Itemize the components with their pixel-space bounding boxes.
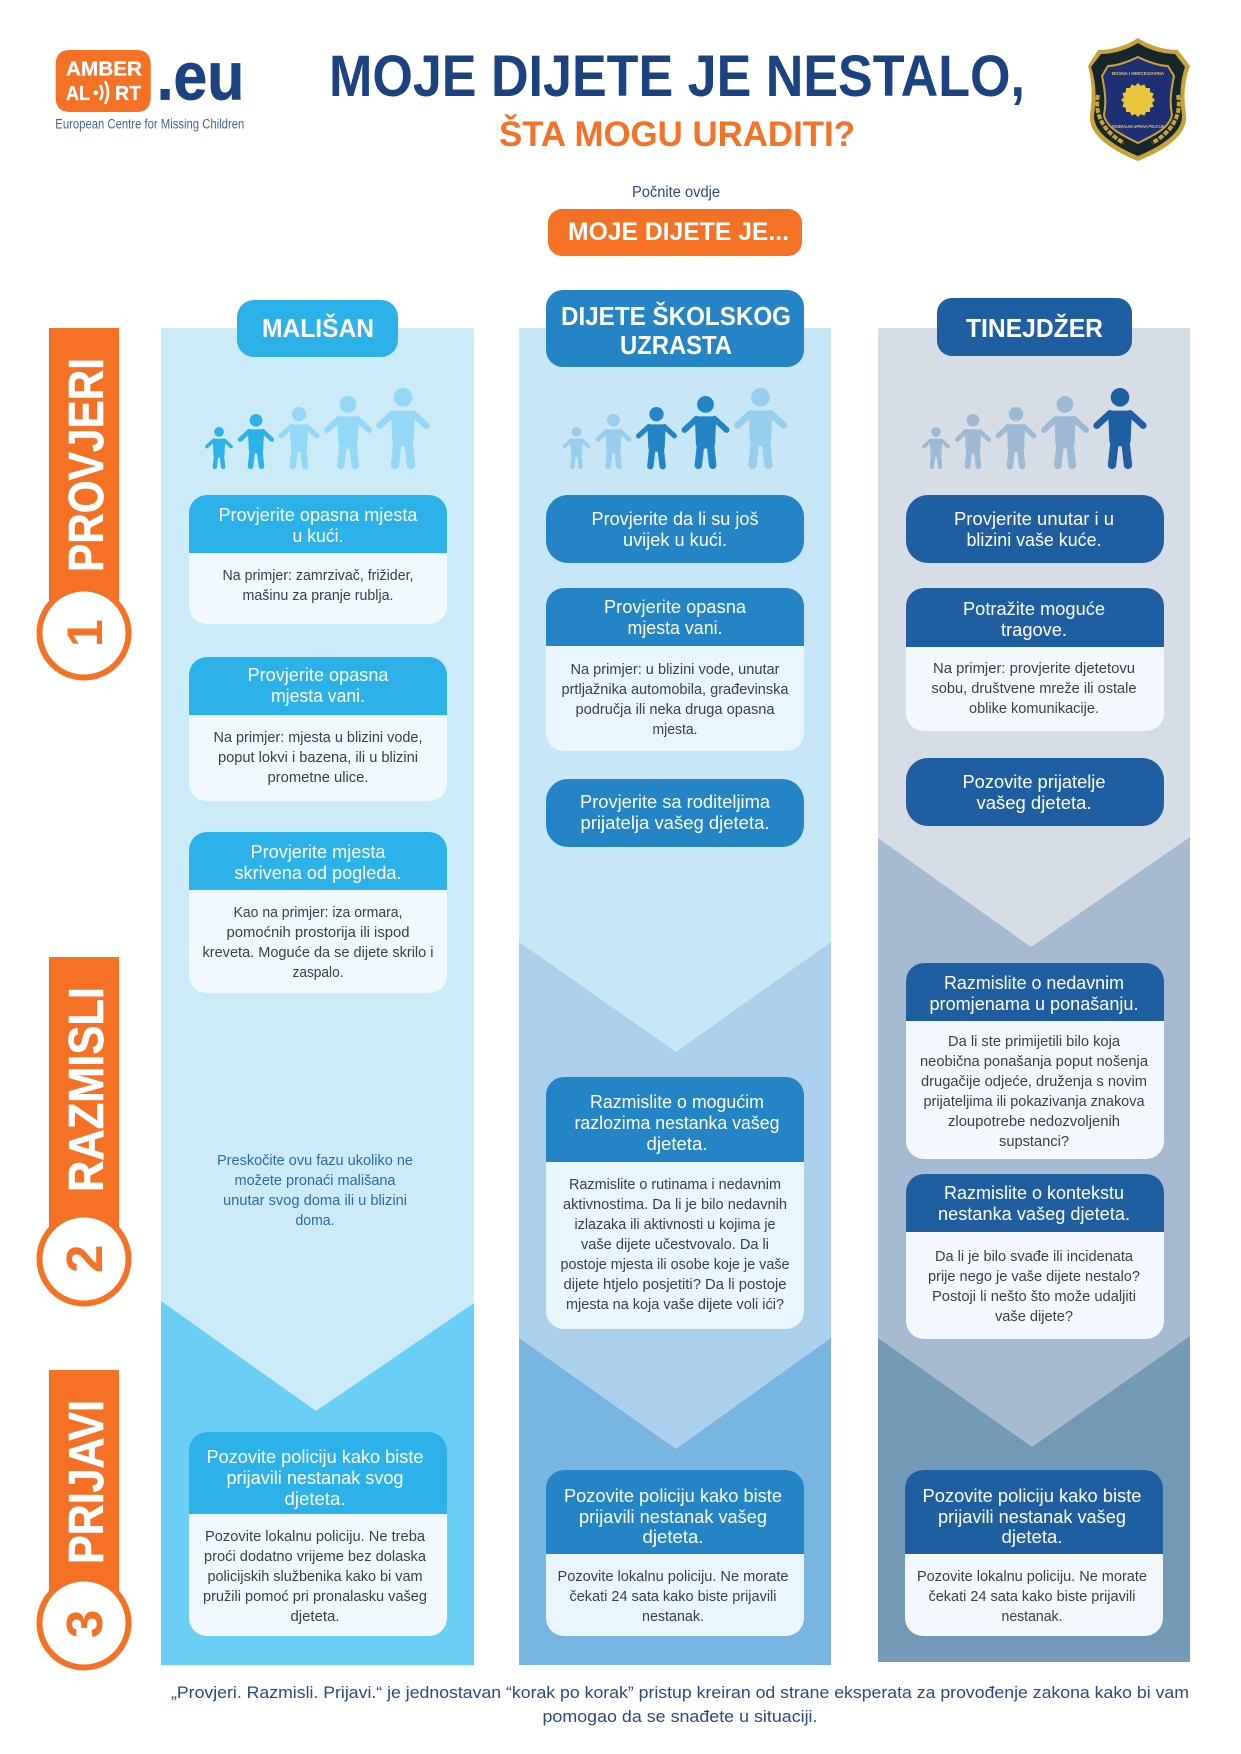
card: school age friends parents [546, 779, 804, 847]
panel: column toddler background [161, 328, 474, 1665]
card: toddler hidden places: zaspalo. [292, 964, 344, 981]
card: teenager call police: čekati 24 sata kako biste prijavili [928, 1588, 1136, 1605]
step 2: RAZMISLI: RAZMISLI [60, 987, 114, 1192]
card: toddler dangerous places outside: Provjerite opasna [248, 665, 389, 685]
step 3: PRIJAVI [40, 1370, 128, 1668]
card: toddler dangerous places outside: prometne ulice. [268, 769, 368, 786]
icon: age figures teenager [924, 388, 1143, 467]
note: toddler skip phase: doma. [296, 1212, 334, 1229]
card: school age dangerous places outside: mjesta. [652, 721, 698, 738]
logo badge: AL [66, 83, 90, 105]
card: teenager check near home: blizini vaše kuće. [966, 530, 1102, 550]
card: teenager behaviour changes: supstanci? [999, 1133, 1069, 1150]
card: toddler call police: Pozovite lokalnu policiju. Ne treba [205, 1528, 426, 1545]
icon: police badge [1088, 38, 1190, 161]
card: toddler call police [189, 1432, 447, 1636]
card: toddler hidden places: Kao na primjer: iza ormara, [234, 904, 402, 921]
icon: age figures school age [564, 388, 784, 467]
logo badge: RT [115, 83, 141, 105]
icon: age figures toddler [207, 388, 426, 467]
icon: police badge: BOSNA I HERCEGOVINA [1112, 71, 1165, 76]
card: toddler hidden places: kreveta. Moguće da se dijete skrilo i [202, 944, 434, 961]
title: MOJE DIJETE JE NESTALO, [329, 44, 1025, 109]
card: school age call police: djeteta. [642, 1527, 704, 1547]
card: toddler dangerous places outside: poput lokvi i bazena, ili u blizini [218, 749, 418, 766]
card: toddler dangerous places outside: Na primjer: mjesta u blizini vode, [214, 729, 422, 746]
card: teenager context: Razmislite o kontekstu [944, 1183, 1124, 1203]
card: school age call police: nestanak. [642, 1608, 704, 1625]
card: school age reasons: Razmislite o mogućim [590, 1092, 764, 1112]
card: teenager behaviour changes: prijateljima ili pokazivanja znakova [924, 1093, 1145, 1110]
card: school age dangerous places outside: mjesta vani. [628, 618, 722, 638]
card: teenager context: vaše dijete? [995, 1308, 1073, 1325]
card: school age dangerous places outside: područja ili neka druga opasna [576, 701, 775, 718]
card: school age still at home [546, 495, 804, 563]
start button: MOJE DIJETE JE... [568, 218, 789, 246]
card: school age friends parents: Provjerite sa roditeljima [580, 792, 771, 812]
note: toddler skip phase: možete pronaći mališana [234, 1172, 396, 1189]
card: teenager call police: Pozovite policiju kako biste [922, 1486, 1142, 1506]
card: school age reasons: djeteta. [646, 1134, 708, 1154]
step 1: PROVJERI [40, 328, 128, 678]
step 2: RAZMISLI [40, 957, 128, 1304]
card: teenager context: prije nego je vaše dijete nestalo? [928, 1268, 1140, 1285]
card: teenager clues [906, 588, 1164, 731]
footer note [171, 1683, 1189, 1726]
card: teenager clues: tragove. [1001, 620, 1067, 640]
card: school age friends parents: prijatelja vašeg djeteta. [580, 813, 770, 833]
footer note: pomogao da se snađete u situaciji. [542, 1707, 818, 1726]
card: school age reasons [546, 1077, 804, 1329]
card: teenager call police: nestanak. [1002, 1608, 1062, 1625]
card: school age call police [546, 1470, 804, 1636]
note: toddler skip phase: unutar svog doma ili u blizini [223, 1192, 407, 1209]
card: school age reasons: Razmislite o rutinama i nedavnim [569, 1176, 781, 1193]
icon: police badge: FEDERALNA UPRAVA POLICIJE [1112, 124, 1164, 129]
card: teenager behaviour changes: drugačije odjeće, druženja s novim [921, 1073, 1147, 1090]
card: teenager context: Postoji li nešto što može udaljiti [932, 1288, 1136, 1305]
card: teenager call police: djeteta. [1002, 1527, 1062, 1547]
card: toddler call police: prijavili nestanak svog [226, 1468, 404, 1488]
step 1: PROVJERI: 1 [57, 619, 113, 647]
card: teenager behaviour changes: Da li ste primijetili bilo koja [948, 1033, 1121, 1050]
card: teenager behaviour changes: Razmislite o nedavnim [944, 973, 1124, 993]
card: school age dangerous places outside: prtljažnika automobila, građevinska [562, 681, 789, 698]
card: school age dangerous places outside: Provjerite opasna [604, 597, 747, 617]
card: teenager call police [905, 1470, 1163, 1636]
card: school age call police: Pozovite policiju kako biste [564, 1486, 782, 1506]
card: toddler call police: pružili pomoć pri pronalasku vašeg [203, 1588, 427, 1605]
card: toddler dangerous places at home: u kući. [292, 526, 344, 546]
note: toddler skip phase [217, 1152, 413, 1229]
heading: teenager [937, 298, 1132, 356]
heading: school age: UZRASTA [620, 330, 732, 360]
card: teenager call police: prijavili nestanak vašeg [938, 1507, 1126, 1527]
card: school age reasons: postoje mjesta ili osobe koje je vaše [560, 1256, 790, 1273]
logo domain: .eu [157, 38, 244, 114]
logo tagline: European Centre for Missing Children [55, 116, 244, 131]
card: teenager check near home: Provjerite unutar i u [954, 509, 1114, 529]
card: teenager behaviour changes: neobična ponašanja poput nošenja [920, 1053, 1149, 1070]
card: toddler dangerous places at home [189, 495, 447, 624]
card: teenager context: nestanka vašeg djeteta. [938, 1204, 1130, 1224]
card: teenager context [906, 1174, 1164, 1339]
panel: column teenager background [878, 328, 1190, 1662]
card: toddler hidden places: Provjerite mjesta [250, 842, 386, 862]
heading: toddler [237, 300, 398, 357]
card: school age reasons: aktivnostima. Da li je bilo nedavnih [563, 1196, 787, 1213]
step 2: RAZMISLI: 2 [56, 1245, 113, 1273]
heading: school age: DIJETE ŠKOLSKOG [561, 301, 791, 331]
card: school age reasons: vaše dijete učestvovalo. Da li [581, 1236, 769, 1253]
card: toddler dangerous places at home: Na primjer: zamrzivač, frižider, [222, 567, 414, 584]
step 3: PRIJAVI: 3 [56, 1610, 113, 1638]
step 3: PRIJAVI: PRIJAVI [60, 1400, 114, 1564]
card: school age reasons: dijete htjelo posjetiti? Da li postoje [564, 1276, 786, 1293]
card: teenager call police: Pozovite lokalnu policiju. Ne morate [917, 1568, 1147, 1585]
card: teenager call friends: Pozovite prijatelje [962, 772, 1106, 792]
card: toddler dangerous places at home: Provjerite opasna mjesta [218, 505, 418, 525]
logo: Amber Alert [55, 38, 244, 131]
card: school age dangerous places outside [546, 588, 804, 751]
card: toddler hidden places [189, 832, 447, 993]
card: school age call police: Pozovite lokalnu policiju. Ne morate [558, 1568, 788, 1585]
start button [548, 209, 802, 256]
card: toddler dangerous places at home: mašinu za pranje rublja. [242, 587, 394, 604]
logo badge: AMBER [66, 59, 143, 81]
card: toddler hidden places: pomoćnih prostorija ili ispod [226, 924, 410, 941]
card: toddler call police: djeteta. [290, 1608, 340, 1625]
subtitle: ŠTA MOGU URADITI? [499, 114, 855, 154]
card: teenager call friends: vašeg djeteta. [976, 793, 1092, 813]
heading: toddler: MALIŠAN [262, 313, 374, 343]
card: school age still at home: uvijek u kući. [623, 530, 727, 550]
card: toddler hidden places: skrivena od pogleda. [234, 863, 402, 883]
card: school age reasons: izlazaka ili aktivnosti u kojima je [574, 1216, 776, 1233]
card: teenager clues: oblike komunikacije. [969, 700, 1099, 717]
card: teenager context: Da li je bilo svađe ili incidenata [935, 1248, 1134, 1265]
card: school age dangerous places outside: Na primjer: u blizini vode, unutar [570, 661, 780, 678]
card: toddler call police: djeteta. [284, 1489, 346, 1509]
note: toddler skip phase: Preskočite ovu fazu ukoliko ne [217, 1152, 413, 1169]
panel: column school age background [519, 328, 831, 1665]
card: school age still at home: Provjerite da li su još [592, 509, 758, 529]
card: school age call police: čekati 24 sata kako biste prijavili [570, 1588, 776, 1605]
card: toddler dangerous places outside [189, 657, 447, 801]
card: teenager clues: Potražite moguće [963, 599, 1105, 619]
card: teenager check near home [906, 495, 1164, 563]
card: toddler dangerous places outside: mjesta vani. [271, 686, 365, 706]
card: toddler call police: policijskih službenika kako bi vam [208, 1568, 422, 1585]
start here label: Počnite ovdje [632, 184, 720, 201]
card: teenager behaviour changes: promjenama u ponašanju. [930, 994, 1138, 1014]
card: school age reasons: razlozima nestanka vašeg [574, 1113, 780, 1133]
card: teenager clues: Na primjer: provjerite djetetovu [933, 660, 1135, 677]
card: toddler call police: proći dodatno vrijeme bez dolaska [204, 1548, 427, 1565]
step 1: PROVJERI: PROVJERI [60, 358, 114, 572]
footer note: „Provjeri. Razmisli. Prijavi.“ je jednostavan “korak po korak” pristup kreiran od strane eksperata za provođenje zakona kako bi vam [171, 1683, 1189, 1702]
card: school age reasons: mjesta na koja vaše dijete voli ići? [566, 1296, 784, 1313]
heading: school age [546, 290, 804, 367]
card: teenager behaviour changes: zloupotrebe nedozvoljenih [948, 1113, 1120, 1130]
heading: teenager: TINEJDŽER [966, 313, 1103, 343]
card: teenager behaviour changes [906, 963, 1164, 1159]
card: teenager clues: sobu, društvene mreže ili ostale [932, 680, 1136, 697]
logo badge [56, 50, 151, 112]
card: school age call police: prijavili nestanak vašeg [579, 1507, 767, 1527]
card: teenager call friends [906, 758, 1164, 826]
card: toddler call police: Pozovite policiju kako biste [206, 1447, 424, 1467]
